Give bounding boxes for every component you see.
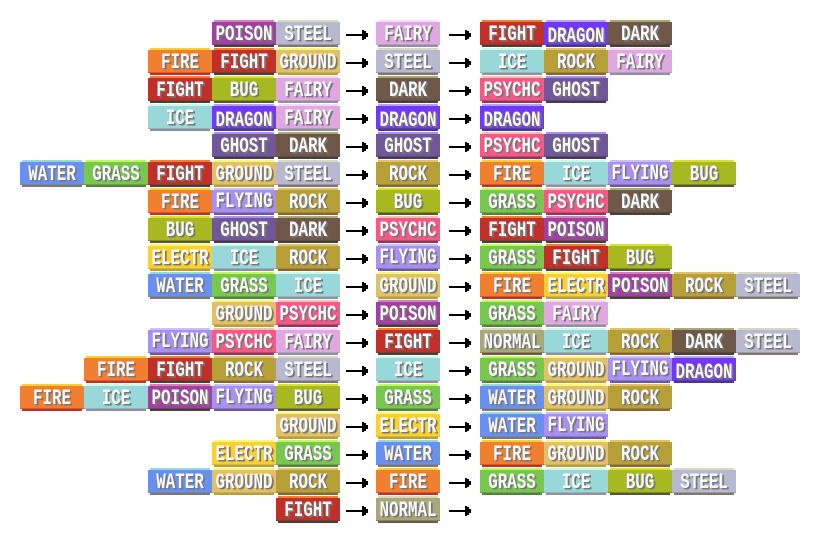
badge: psychc: PSYCHC [215, 330, 273, 355]
badge: electr: ELECTR [215, 442, 273, 467]
badge: grass [84, 160, 148, 188]
badge: ghost [212, 216, 276, 244]
badge: ground: GROUND [547, 358, 605, 383]
row: dark [148, 76, 608, 103]
badge: water: WATER [488, 414, 536, 439]
badge: grass: GRASS [488, 358, 536, 383]
badge: grass [480, 356, 544, 384]
badge: psychc: PSYCHC [379, 218, 437, 243]
badge: ground: GROUND [215, 470, 273, 495]
badge: dark: DARK [621, 190, 659, 215]
row: fairy [212, 20, 672, 47]
badge: fire [84, 356, 148, 384]
badge: flying: FLYING [215, 385, 273, 410]
badge: rock [276, 468, 340, 496]
arrow [346, 170, 368, 180]
badge: bug: BUG [626, 246, 654, 271]
badge: fight [148, 160, 212, 188]
badge: psychc: PSYCHC [279, 302, 337, 327]
badge: fight [544, 244, 608, 272]
badge: dark [276, 216, 340, 244]
badge: grass: GRASS [384, 386, 432, 411]
badge: steel [276, 160, 340, 188]
badge: water: WATER [488, 386, 536, 411]
badge: ground: GROUND [215, 162, 273, 187]
badge: dragon: DRAGON [547, 24, 605, 49]
badge: grass: GRASS [284, 442, 332, 467]
badge: ice [376, 356, 440, 384]
badge: water: WATER [384, 442, 432, 467]
badge: rock [672, 272, 736, 300]
arrow [346, 478, 368, 488]
badge: steel: STEEL [284, 162, 332, 187]
arrow [346, 198, 368, 208]
badge: ice: ICE [294, 274, 322, 299]
badge: ghost [544, 76, 608, 104]
badge: fire: FIRE [389, 470, 427, 495]
badge: electr: ELECTR [151, 246, 209, 271]
arrow [449, 198, 471, 208]
badge: dark [608, 188, 672, 216]
badge: ground: GROUND [279, 414, 337, 439]
arrow [449, 254, 471, 264]
badge: fairy [276, 76, 340, 104]
badge: fight: FIGHT [156, 358, 204, 383]
arrow [346, 254, 368, 264]
badge: psychc: PSYCHC [483, 78, 541, 103]
badge: dragon: DRAGON [379, 108, 437, 133]
badge: rock [276, 188, 340, 216]
badge: rock [212, 356, 276, 384]
badge: fight [148, 76, 212, 104]
badge: dark [608, 20, 672, 48]
badge: fire: FIRE [97, 358, 135, 383]
badge: fight [212, 48, 276, 76]
badge: fairy [276, 328, 340, 356]
arrow [346, 282, 368, 292]
arrow [449, 450, 471, 460]
badge: fire [148, 188, 212, 216]
badge: dark [672, 328, 736, 356]
badge: bug [608, 468, 672, 496]
badge: grass [276, 440, 340, 468]
arrow [346, 86, 368, 96]
badge: fairy [608, 48, 672, 76]
badge: fire [148, 48, 212, 76]
row: rock [20, 160, 736, 187]
badge: fire: FIRE [33, 386, 71, 411]
badge: steel [672, 468, 736, 496]
arrow [346, 226, 368, 236]
badge: bug [672, 160, 736, 188]
badge: water [480, 384, 544, 412]
badge: rock [608, 384, 672, 412]
badge: rock [608, 440, 672, 468]
row: poison [212, 300, 608, 327]
badge: fight: FIGHT [156, 78, 204, 103]
badge: psychc: PSYCHC [483, 134, 541, 159]
arrow [346, 58, 368, 68]
arrow [346, 422, 368, 432]
row: ground [148, 272, 800, 299]
badge: fire [480, 440, 544, 468]
badge: bug [276, 384, 340, 412]
badge: fire: FIRE [493, 274, 531, 299]
badge: dark [276, 132, 340, 160]
arrow [346, 450, 368, 460]
badge: fight [480, 216, 544, 244]
badge: rock: ROCK [621, 330, 659, 355]
badge: rock: ROCK [557, 50, 595, 75]
arrow [346, 394, 368, 404]
arrow [449, 506, 471, 516]
row: ice [84, 356, 736, 383]
badge: fire: FIRE [493, 442, 531, 467]
badge: rock: ROCK [289, 246, 327, 271]
badge: ice [84, 384, 148, 412]
badge: rock [608, 328, 672, 356]
badge: ice: ICE [230, 246, 258, 271]
row: grass [20, 384, 672, 411]
badge: water [148, 272, 212, 300]
badge: bug: BUG [294, 386, 322, 411]
badge: rock [376, 160, 440, 188]
badge: water: WATER [156, 274, 204, 299]
badge: fairy: FAIRY [616, 50, 664, 75]
badge: water [376, 440, 440, 468]
arrow [449, 30, 471, 40]
badge: fight [148, 356, 212, 384]
badge: ice [544, 160, 608, 188]
badge: flying: FLYING [151, 329, 209, 354]
badge: fire: FIRE [493, 162, 531, 187]
badge: water [480, 412, 544, 440]
badge: grass [480, 244, 544, 272]
badge: grass [376, 384, 440, 412]
arrow [449, 478, 471, 488]
row: fight [148, 328, 800, 355]
badge: psychc: PSYCHC [547, 190, 605, 215]
badge: water: WATER [156, 470, 204, 495]
badge: poison: POISON [379, 302, 437, 327]
badge: ghost: GHOST [384, 134, 432, 159]
badge: ice: ICE [498, 50, 526, 75]
badge: fight: FIGHT [284, 498, 332, 523]
badge: rock: ROCK [289, 190, 327, 215]
badge: ice [276, 272, 340, 300]
badge: flying: FLYING [379, 245, 437, 270]
badge: poison: POISON [547, 218, 605, 243]
badge: dark [376, 76, 440, 104]
badge: ghost [212, 132, 276, 160]
badge: rock: ROCK [621, 442, 659, 467]
badge: ice [212, 244, 276, 272]
badge: grass: GRASS [220, 274, 268, 299]
badge: grass: GRASS [488, 190, 536, 215]
arrow [346, 366, 368, 376]
badge: electr: ELECTR [379, 414, 437, 439]
badge: ice: ICE [394, 358, 422, 383]
badge: fairy: FAIRY [384, 22, 432, 47]
badge: normal: NORMAL [483, 330, 541, 355]
badge: fight: FIGHT [384, 330, 432, 355]
badge: fight: FIGHT [220, 50, 268, 75]
badge: bug: BUG [626, 470, 654, 495]
badge: steel [736, 328, 800, 356]
badge: grass: GRASS [488, 246, 536, 271]
badge: fire [20, 384, 84, 412]
badge: grass: GRASS [92, 162, 140, 187]
badge: electr: ELECTR [547, 274, 605, 299]
badge: poison: POISON [215, 22, 273, 47]
badge: ice: ICE [562, 470, 590, 495]
badge: fight: FIGHT [488, 218, 536, 243]
badge: steel: STEEL [384, 50, 432, 75]
badge: fight: FIGHT [488, 22, 536, 47]
badge: ghost: GHOST [220, 218, 268, 243]
badge: poison: POISON [611, 274, 669, 299]
arrow [449, 422, 471, 432]
badge: bug: BUG [394, 190, 422, 215]
badge: bug [212, 76, 276, 104]
badge: steel: STEEL [744, 274, 792, 299]
badge: steel: STEEL [284, 358, 332, 383]
badge: steel: STEEL [284, 22, 332, 47]
arrow [346, 30, 368, 40]
badge: flying: FLYING [611, 357, 669, 382]
badge: grass [480, 468, 544, 496]
badge: fire [480, 160, 544, 188]
badge: dragon: DRAGON [675, 360, 733, 385]
arrow [449, 86, 471, 96]
badge: water: WATER [28, 162, 76, 187]
badge: bug [376, 188, 440, 216]
badge: rock [544, 48, 608, 76]
badge: dark: DARK [389, 78, 427, 103]
badge: flying: FLYING [215, 189, 273, 214]
badge: normal: NORMAL [379, 498, 437, 523]
badge: grass [480, 300, 544, 328]
badge: bug [148, 216, 212, 244]
arrow [346, 506, 368, 516]
badge: bug [608, 244, 672, 272]
badge: bug: BUG [230, 78, 258, 103]
badge: fairy: FAIRY [284, 330, 332, 355]
badge: steel [276, 20, 340, 48]
badge: ice [544, 468, 608, 496]
badge: rock: ROCK [685, 274, 723, 299]
badge: grass [212, 272, 276, 300]
badge: flying: FLYING [611, 161, 669, 186]
badge: steel [376, 48, 440, 76]
badge: ghost: GHOST [552, 134, 600, 159]
badge: fairy [276, 104, 340, 132]
arrow [449, 282, 471, 292]
row: normal [276, 496, 471, 523]
arrow [346, 142, 368, 152]
badge: rock [276, 244, 340, 272]
badge: ghost [376, 132, 440, 160]
row: psychc [148, 216, 608, 243]
arrow [449, 338, 471, 348]
row: flying [148, 244, 672, 271]
badge: rock: ROCK [621, 386, 659, 411]
badge: bug: BUG [690, 162, 718, 187]
badge: fairy: FAIRY [552, 302, 600, 327]
arrow [449, 310, 471, 320]
badge: flying: FLYING [547, 413, 605, 438]
badge: fight [276, 496, 340, 524]
row: water [212, 440, 672, 467]
badge: ice: ICE [562, 162, 590, 187]
badge: ice: ICE [166, 106, 194, 131]
row: steel [148, 48, 672, 75]
badge: water [148, 468, 212, 496]
arrow [346, 114, 368, 124]
row: ghost [212, 132, 608, 159]
badge: fight: FIGHT [552, 246, 600, 271]
row: bug [148, 188, 672, 215]
badge: dragon: DRAGON [215, 108, 273, 133]
arrow [449, 58, 471, 68]
badge: ghost: GHOST [220, 134, 268, 159]
badge: fight: FIGHT [156, 162, 204, 187]
badge: ice: ICE [562, 330, 590, 355]
badge: steel [276, 356, 340, 384]
badge: dark: DARK [289, 134, 327, 159]
badge: fire: FIRE [161, 50, 199, 75]
badge: fairy: FAIRY [284, 106, 332, 131]
badge: ice [480, 48, 544, 76]
badge: steel [736, 272, 800, 300]
badge: fight [376, 328, 440, 356]
badge: fairy [376, 20, 440, 48]
badge: steel: STEEL [680, 470, 728, 495]
badge: ice [148, 104, 212, 132]
badge: fight [480, 20, 544, 48]
badge: fire: FIRE [161, 190, 199, 215]
badge: water [20, 160, 84, 188]
badge: dark: DARK [289, 218, 327, 243]
arrow [449, 170, 471, 180]
arrow [346, 310, 368, 320]
badge: rock: ROCK [389, 162, 427, 187]
badge: bug: BUG [166, 218, 194, 243]
badge: ghost [544, 132, 608, 160]
badge: rock: ROCK [225, 358, 263, 383]
badge: dark: DARK [621, 22, 659, 47]
arrow [449, 226, 471, 236]
badge: grass [480, 188, 544, 216]
badge: ground: GROUND [279, 50, 337, 75]
badge: fire [480, 272, 544, 300]
badge: ice [544, 328, 608, 356]
badge: grass: GRASS [488, 302, 536, 327]
arrow [449, 114, 471, 124]
badge: ghost: GHOST [552, 78, 600, 103]
arrow [449, 366, 471, 376]
badge: fairy [544, 300, 608, 328]
badge: ice: ICE [102, 386, 130, 411]
badge: fairy: FAIRY [284, 78, 332, 103]
badge: ground: GROUND [547, 442, 605, 467]
badge: dark: DARK [685, 330, 723, 355]
row: fire [148, 468, 736, 495]
row: dragon [148, 104, 544, 131]
row: electr [276, 412, 608, 439]
badge: fire [376, 468, 440, 496]
badge: ground: GROUND [215, 302, 273, 327]
badge: ground: GROUND [379, 274, 437, 299]
badge: grass: GRASS [488, 470, 536, 495]
badge: dragon: DRAGON [483, 108, 541, 133]
arrow [449, 142, 471, 152]
badge: rock: ROCK [289, 470, 327, 495]
badge: poison: POISON [151, 386, 209, 411]
badge: steel: STEEL [744, 330, 792, 355]
arrow [346, 338, 368, 348]
arrow [449, 394, 471, 404]
badge: ground: GROUND [547, 386, 605, 411]
